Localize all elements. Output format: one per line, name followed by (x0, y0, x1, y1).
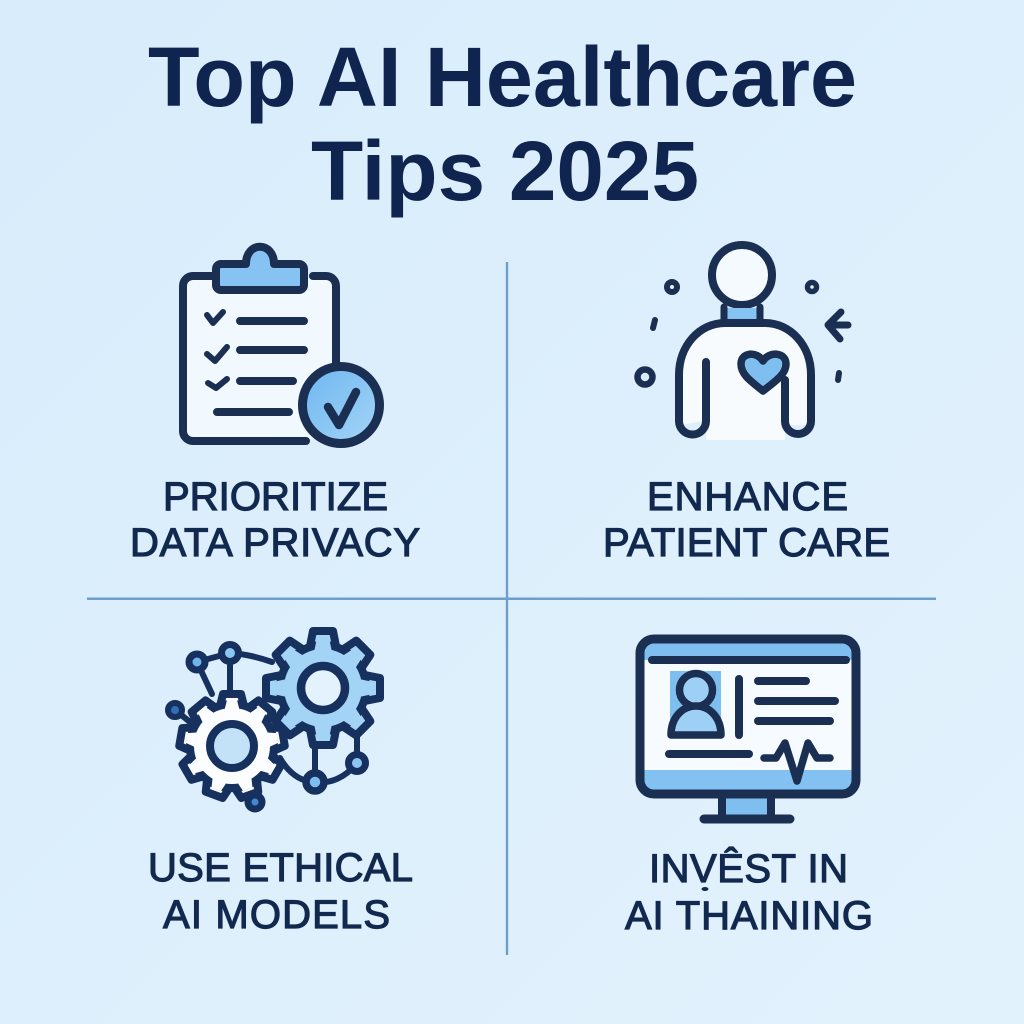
icon: clipboard with check badge (183, 247, 380, 444)
title: Tips 2025 (311, 124, 699, 218)
label: prioritize data privacy: PRIORITIZE (163, 475, 388, 519)
gear: white (179, 694, 285, 799)
label: prioritize data privacy: DATA PRIVACY (130, 521, 420, 565)
label: enhance patient care: ENHANCE (647, 475, 848, 519)
label: use ethical ai models: AI MODELS (163, 893, 390, 937)
icon: gears and network (168, 631, 380, 809)
icon: patient with heart (638, 245, 848, 440)
title: Top AI Healthcare (148, 30, 857, 124)
label: use ethical ai models (148, 846, 413, 937)
label: enhance patient care: PATIENT CARE (603, 521, 890, 565)
gear: blue (266, 631, 380, 745)
label: invest in ai training: AI THAINING (625, 894, 873, 938)
title (148, 30, 857, 218)
label: invest in ai training: INVÊST IN (649, 846, 848, 891)
label: enhance patient care (603, 475, 890, 565)
label: use ethical ai models: USE ETHICAL (148, 846, 413, 890)
panel: use ethical ai models (148, 631, 413, 937)
panel: enhance patient care (603, 245, 890, 565)
vertical divider (506, 262, 508, 955)
icon: monitor with patient record (640, 639, 856, 819)
horizontal divider (87, 598, 936, 600)
label: invest in ai training (625, 846, 873, 938)
panel: prioritize data privacy (130, 247, 420, 565)
label: prioritize data privacy (130, 475, 420, 565)
panel: invest in ai training (625, 639, 873, 938)
